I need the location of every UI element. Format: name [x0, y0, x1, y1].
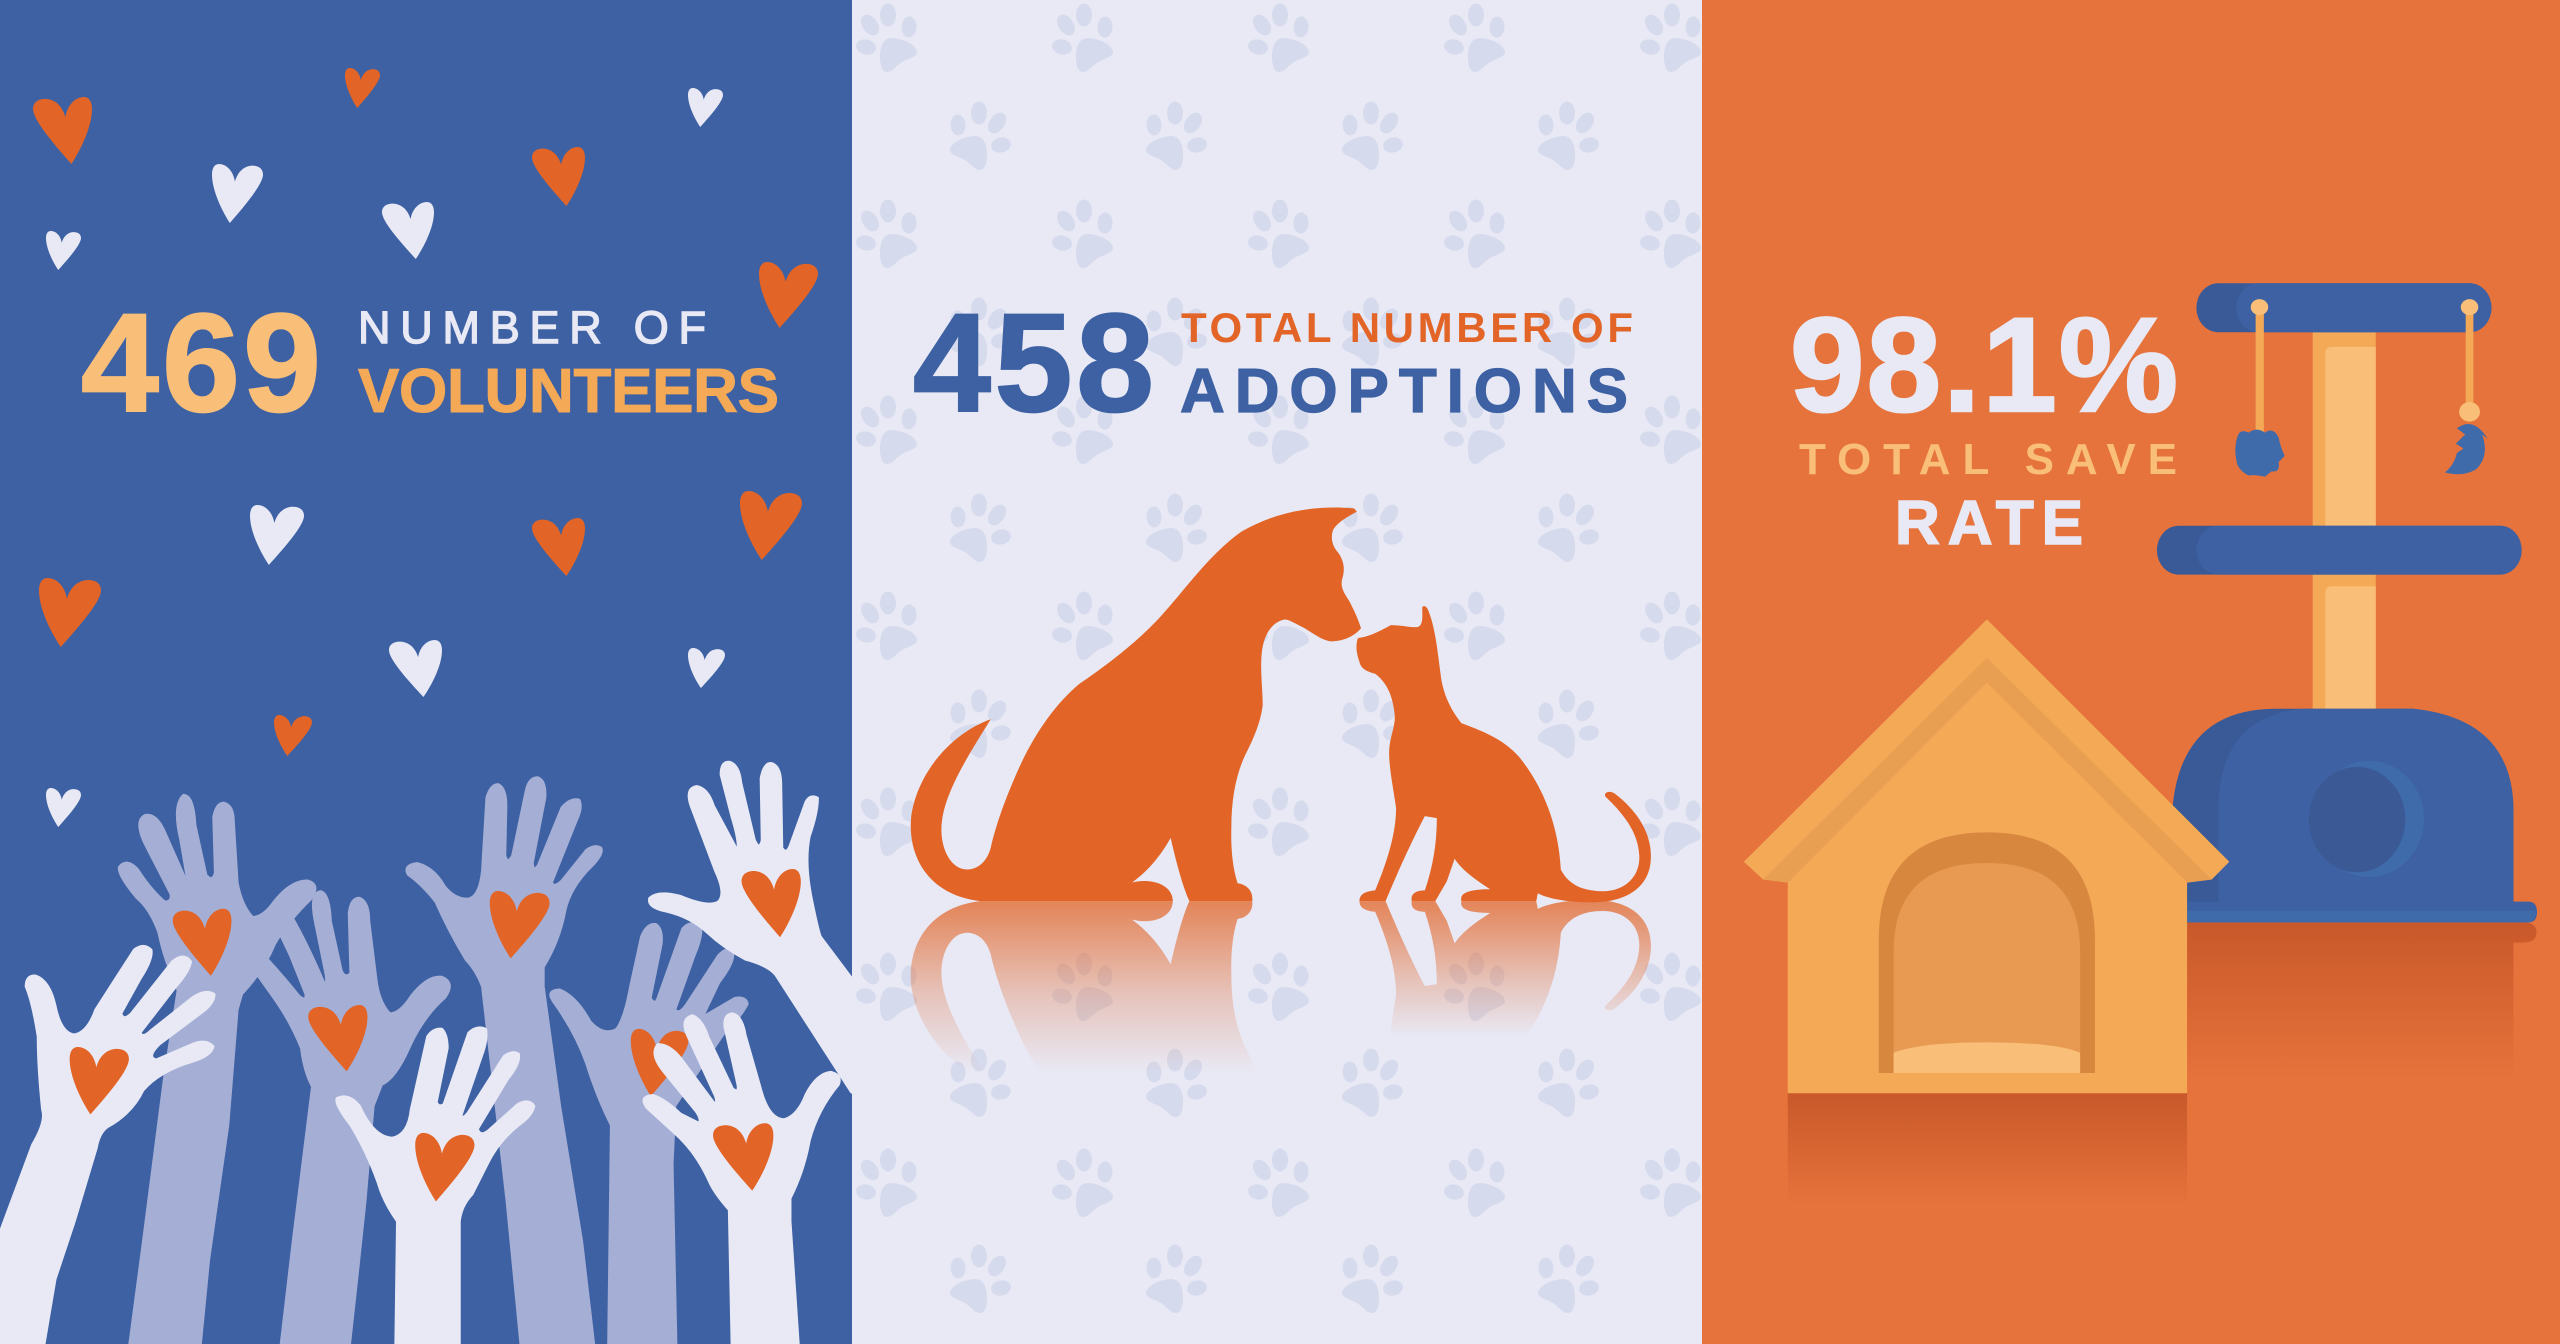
top shelf	[2196, 283, 2491, 332]
panel: adoptions	[852, 0, 1702, 1344]
cushion	[1894, 1042, 2080, 1073]
house shadow	[1788, 1093, 2187, 1206]
dog and cat silhouette with reflection	[911, 508, 1651, 1295]
stat: 458: 458	[913, 284, 1154, 441]
illustration: cat tree and dog house	[1744, 283, 2537, 1206]
raised hands illustration	[0, 762, 852, 1344]
base hole	[2314, 761, 2424, 877]
cat tree	[2157, 283, 2537, 1080]
post	[2313, 330, 2376, 710]
panel: volunteers	[0, 0, 852, 1344]
panel: save rate	[1702, 0, 2560, 1344]
base plate	[2185, 902, 2537, 922]
hand: pale centre	[407, 777, 601, 1344]
tree shadow	[2187, 922, 2536, 1080]
hand: white left	[0, 946, 214, 1344]
reflection	[911, 900, 1651, 1295]
door opening	[1894, 863, 2080, 1073]
label: volunteers: VOLUNTEERS	[358, 357, 779, 426]
dog silhouette	[911, 508, 1361, 901]
hand: white right	[644, 1013, 839, 1344]
roof inner stripe	[1763, 658, 2212, 883]
hanging toy: ball	[2235, 299, 2285, 477]
label: rate: RATE	[1895, 489, 2083, 558]
label: adoptions: ADOPTIONS	[1180, 357, 1628, 426]
hand: white middle	[337, 1028, 534, 1344]
hand: pale right	[551, 923, 747, 1344]
dog house	[1744, 619, 2229, 1206]
label: total save: TOTAL SAVE	[1799, 435, 2177, 484]
label: number of: NUMBER OF	[358, 302, 706, 353]
hanging toy: feather	[2445, 299, 2488, 474]
cat silhouette	[1356, 606, 1651, 902]
hand: pale middle	[258, 891, 449, 1344]
stat: 98.1%: 98.1%	[1790, 291, 2178, 440]
house body	[1788, 682, 2187, 1093]
door frame	[1879, 832, 2095, 1073]
middle shelf	[2157, 526, 2522, 575]
roof	[1744, 619, 2229, 883]
stat: 469: 469	[81, 284, 321, 441]
hand: pale left	[119, 795, 315, 1344]
label: total number of: TOTAL NUMBER OF	[1181, 304, 1633, 351]
floating hearts	[33, 68, 818, 827]
base dome	[2173, 709, 2513, 903]
hand: white top right	[650, 762, 852, 1092]
